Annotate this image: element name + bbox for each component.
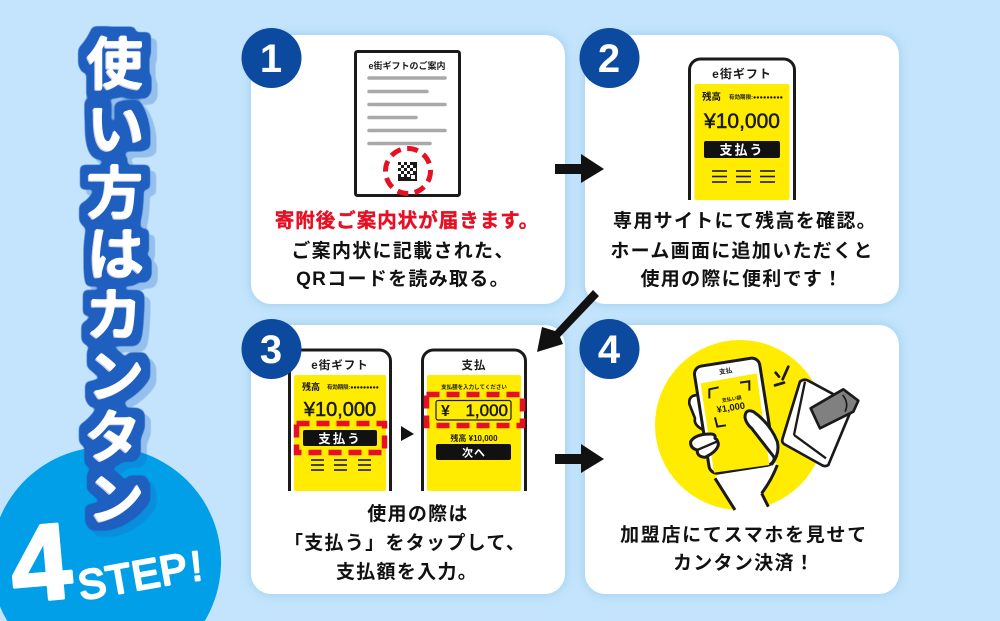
illustration: phone showing balance: 残高 (702, 91, 721, 103)
badge: number 2 (580, 28, 640, 88)
illustration: phone with pay button: e街ギフト (311, 358, 369, 372)
title: vertical heading: タ (84, 392, 142, 474)
text: step 1 description: 寄附後ご案内状が届きます。 (275, 209, 539, 232)
illustration: guide letter with QR code: e街ギフトのご案内 (368, 60, 446, 71)
title: vertical heading: は (88, 209, 144, 291)
title: vertical heading: い (88, 84, 144, 166)
text: step 1 description (275, 209, 539, 290)
text: step 2 description: ホーム画面に追加いただくと (610, 240, 874, 262)
text: step 3 description: 「支払う」をタップして、 (284, 532, 526, 554)
illustration: guide letter with QR code (356, 52, 460, 196)
illustration: paying with smartphone at terminal (655, 340, 858, 510)
illustration: phone with amount input: ¥ (441, 403, 450, 420)
badge: number 1: 1 (260, 37, 282, 81)
title: vertical heading: 使 (86, 19, 144, 101)
panel: step 2 (585, 35, 899, 304)
arrow: step 2 to step 3 (537, 290, 599, 352)
illustration: phone showing balance: 支払う (719, 142, 765, 158)
badge: number 4 (580, 319, 640, 379)
badge: number 3: 3 (260, 328, 282, 372)
title: vertical heading: 方 (86, 148, 144, 230)
illustration: paying with smartphone at terminal: ¥1,000 (716, 401, 746, 415)
badge: number 1 (242, 28, 302, 88)
illustration: paying with smartphone at terminal: 支払 (718, 365, 733, 376)
illustration: phone with pay button: 支払う (318, 431, 362, 446)
text: step 1 description: ご案内状に記載された、 (291, 239, 515, 262)
illustration: phone with amount input: 1,000 (465, 401, 508, 420)
text: step 2 description: 使用の際に便利です！ (640, 268, 844, 290)
illustration: phone showing balance: e街ギフト (712, 66, 772, 81)
text: step 4 description (620, 524, 868, 574)
text: step 1 description: QRコードを読み取る。 (296, 268, 510, 290)
illustration: phone with amount input: 残高 ¥10,000 (450, 433, 498, 443)
illustration: phone with pay button: ¥10,000 (303, 399, 376, 421)
illustration: phone with amount input (422, 350, 526, 491)
illustration: phone with amount input: 次へ (462, 446, 486, 460)
text: step 3 description (284, 503, 526, 583)
illustration: phone with pay button (290, 350, 390, 491)
title: vertical heading: ン (88, 331, 144, 413)
blue step circle (0, 447, 221, 621)
arrow: step 1 to step 2 (555, 154, 604, 183)
badge text: 4 STEP: STEP (75, 544, 192, 609)
badge text: 4 STEP (6, 500, 205, 621)
illustration: phone with amount input: 支払額を入力してください (441, 383, 507, 391)
title: vertical heading: カ (86, 270, 142, 352)
title: vertical heading: ン (88, 454, 144, 536)
text: step 2 description: 専用サイトにて残高を確認。 (613, 209, 877, 232)
illustration: phone showing balance: 有効期限:●●●●●●●●● (729, 93, 783, 101)
illustration: phone with amount input: 支払 (462, 358, 486, 372)
badge: number 3 (242, 319, 302, 379)
panel: step 1 (251, 35, 565, 304)
title: vertical heading (84, 19, 144, 536)
badge: number 2: 2 (598, 37, 620, 81)
illustration: phone showing balance (690, 59, 794, 200)
panel: step 3 (251, 325, 565, 594)
text: step 3 description: 使用の際は (367, 503, 469, 525)
illustration: phone showing balance: ¥10,000 (703, 110, 780, 133)
illustration: paying with smartphone at terminal: 支払い額 (721, 394, 742, 404)
panel: step 4 (585, 325, 899, 594)
badge: number 4: 4 (598, 328, 621, 372)
illustration: phone with pay button: 残高 (302, 381, 320, 392)
icon: small play arrow (401, 426, 414, 441)
arrow: step 3 to step 4 (555, 444, 604, 473)
text: step 2 description (610, 209, 877, 290)
text: step 4 description: カンタン決済！ (673, 552, 815, 574)
badge text: 4 STEP: ! (188, 542, 205, 590)
text: step 3 description: 支払額を入力。 (336, 561, 478, 583)
text: step 4 description: 加盟店にてスマホを見せて (620, 524, 868, 546)
illustration: phone with pay button: 有効期限:●●●●●●●●● (327, 383, 379, 391)
